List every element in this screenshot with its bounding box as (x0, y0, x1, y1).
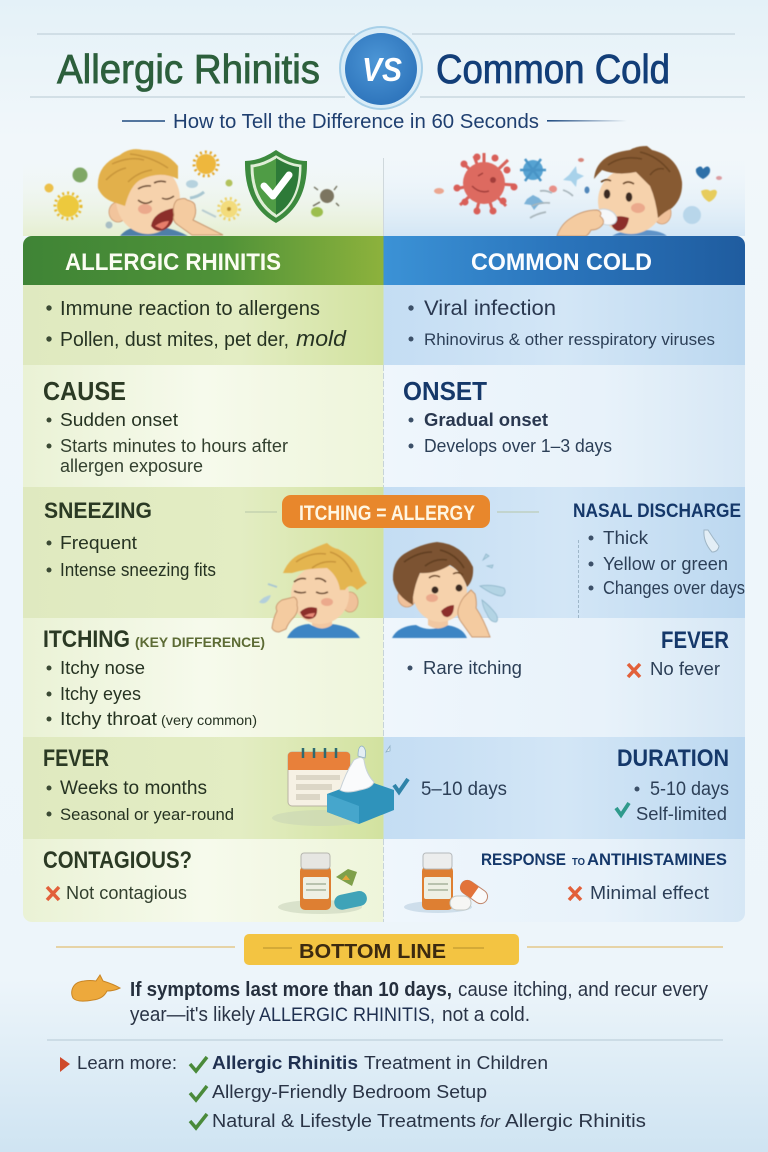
text block: cold fever: FEVER (661, 627, 729, 654)
text block: cold fever: No fever (650, 659, 720, 679)
text block: cause: allergen exposure (60, 456, 203, 476)
text block: duration: 5-10 days (650, 779, 729, 800)
text block: learn more links (60, 1053, 646, 1131)
vs badge (340, 27, 422, 109)
text block: contagious: Not contagious (66, 883, 187, 903)
text block: allergy fever (43, 745, 234, 824)
row backgrounds: contagious and antihistamines (23, 839, 745, 922)
heading: common cold band: COMMON COLD (471, 249, 652, 276)
icon: pointing hand (72, 975, 120, 1001)
icon: allergens left (44, 152, 339, 228)
text block: cause: CAUSE (43, 376, 126, 406)
text block: allergic definition: mold (296, 326, 347, 351)
heading: allergic rhinitis band: ALLERGIC RHINITIS (65, 249, 281, 276)
text block: cold definition: Viral infection (424, 297, 556, 320)
text block: antihistamines: ANTIHISTAMINES (587, 850, 727, 869)
text block: itching key difference: ITCHING (43, 626, 130, 653)
icon: blue virus particles (520, 158, 722, 224)
callout: itching equals allergy: ITCHING = ALLERGY (299, 502, 475, 525)
text block: learn more links: for (480, 1112, 501, 1131)
text block: allergy fever: Seasonal or year-round (60, 805, 234, 824)
text block: learn more links: Allergic Rhinitis (505, 1111, 646, 1131)
title: Allergic Rhinitis (57, 46, 320, 92)
text block: cause: Sudden onset (60, 410, 178, 430)
text block: itching key difference (43, 626, 265, 729)
text block: itching key difference: Itchy throat (60, 709, 157, 729)
text block: itching key difference: Itchy nose (60, 658, 145, 678)
vs badge: VS (362, 51, 402, 88)
text block: allergic definition: Immune reaction to allergens (60, 298, 320, 320)
text block: duration: DURATION (617, 745, 729, 772)
text block: bottom line message (130, 979, 708, 1026)
text block: cold fever (628, 627, 729, 679)
text block: contagious: CONTAGIOUS? (43, 847, 192, 874)
row backgrounds: sneezing and discharge (23, 487, 745, 618)
text block: learn more links: Natural & Lifestyle Treatments (212, 1111, 476, 1131)
icon: shield (245, 150, 307, 223)
text block: bottom line message: not a cold. (442, 1004, 530, 1026)
text block: duration: Self-limited (636, 804, 727, 824)
text block: allergic definition: Pollen, dust mites, pet der, (60, 329, 289, 351)
row backgrounds: definitions (23, 285, 745, 365)
text block: allergy fever: FEVER (43, 745, 109, 772)
text block: nasal discharge: Changes over days (603, 578, 745, 598)
text block: onset: Develops over 1–3 days (424, 436, 612, 456)
text block: bottom line message: If symptoms last more than 10 days, (130, 979, 452, 1001)
text block: itching key difference: (KEY DIFFERENCE) (135, 634, 265, 650)
text block: bottom line message: year—it's likely (130, 1004, 255, 1026)
text block: sneezing (44, 498, 216, 580)
text block: duration (616, 745, 729, 824)
text block: allergy fever: Weeks to months (60, 778, 207, 799)
text block: nasal discharge: Yellow or green (603, 554, 728, 574)
text block: cold definition (408, 297, 715, 349)
icon: red virus (434, 153, 557, 214)
text block: nasal discharge: NASAL DISCHARGE (573, 501, 741, 522)
illustration: brown-haired boy itching (392, 542, 505, 638)
text block: learn more links: Allergy-Friendly Bedroom Setup (212, 1082, 487, 1102)
text block: itching key difference: (very common) (161, 712, 257, 728)
text block: rare itching: Rare itching (423, 658, 522, 678)
text block: nasal discharge: Thick (603, 528, 649, 548)
text block: antihistamines (481, 850, 727, 903)
text block: bottom line message: ALLERGIC RHINITIS, (259, 1005, 435, 1026)
text block: antihistamines: RESPONSE (481, 850, 566, 869)
text block: learn more links: Treatment in Children (364, 1053, 548, 1073)
panel: comparison card (23, 236, 745, 922)
illustration: blond boy itching (259, 543, 367, 638)
title: Common Cold (436, 46, 670, 92)
heading: bottom line (56, 934, 723, 965)
text block: cold definition: Rhinovirus & other resspiratory viruses (424, 330, 715, 349)
text block: antihistamines: TO (572, 857, 585, 868)
row backgrounds: itching and fever (23, 618, 745, 737)
illustration: blond boy sneezing (98, 149, 223, 236)
illustration: brown-haired boy with tissue (530, 146, 682, 236)
text block: contagious (43, 847, 192, 903)
icon: medicine bottle and pills left (278, 853, 368, 914)
heading: bottom line: BOTTOM LINE (299, 941, 446, 963)
text block: learn more links: Learn more: (77, 1053, 177, 1073)
title (57, 46, 670, 92)
header: common cold (384, 236, 745, 285)
text block: sneezing: Frequent (60, 533, 137, 553)
text block: onset: ONSET (403, 376, 487, 406)
row backgrounds: cause and onset (23, 365, 745, 487)
text block: antihistamines: Minimal effect (590, 883, 709, 903)
header: allergic rhinitis (23, 236, 384, 285)
text block: cause: Starts minutes to hours after (60, 436, 288, 456)
icon: medicine bottle and pills right (404, 853, 490, 913)
text block: sneezing: SNEEZING (44, 498, 152, 523)
callout: itching equals allergy (245, 495, 539, 528)
text block: itching key difference: Itchy eyes (60, 684, 141, 704)
icon: nasal drop (704, 530, 719, 552)
text block: onset (403, 376, 612, 456)
text block: bottom line message: cause itching, and recur every (458, 979, 708, 1001)
icon: calendar and tissue box (272, 746, 394, 826)
row backgrounds: fever and duration (23, 737, 745, 839)
text block: allergic definition (46, 298, 347, 351)
text block: cold duration left: 5–10 days (421, 779, 507, 800)
text block: nasal discharge (573, 501, 745, 598)
text block: onset: Gradual onset (424, 410, 548, 430)
text block: sneezing: Intense sneezing fits (60, 560, 216, 580)
subtitle: How to Tell the Difference in 60 Seconds (173, 111, 539, 133)
illustration panel backdrop (23, 158, 745, 236)
text block: learn more links: Allergic Rhinitis (212, 1053, 358, 1073)
text block: cause (43, 376, 288, 476)
